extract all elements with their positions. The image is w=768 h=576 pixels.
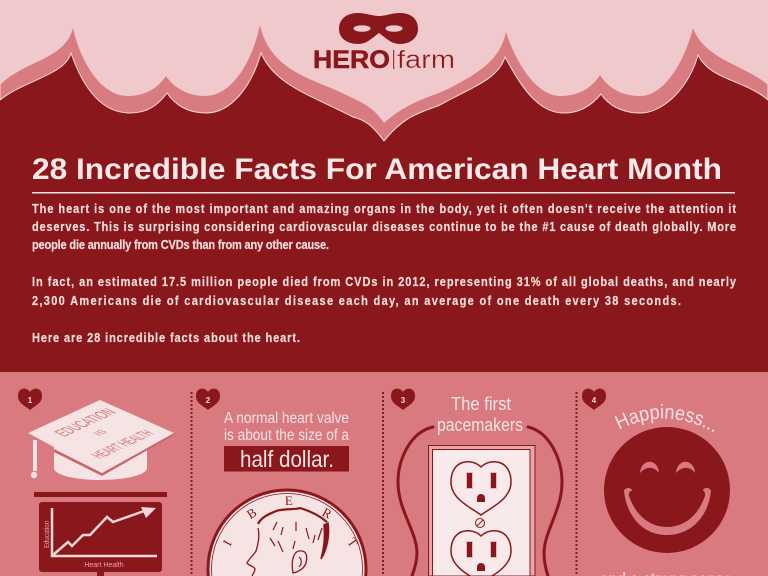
icon: mask	[339, 13, 418, 44]
panel 3: heart outlet	[428, 446, 535, 576]
coin legend: B	[244, 504, 260, 522]
coin legend: I	[219, 537, 235, 548]
heart 4: 4	[592, 396, 597, 405]
intro text: people die annually from CVDs than from any other cause.	[32, 238, 329, 252]
intro text: In fact, an estimated 17.5 million people died from CVDs in 2012, representing 31% of all global deaths, and nearly	[32, 275, 736, 289]
panel 3: pacemakers heading: pacemakers	[437, 415, 523, 435]
cap text	[50, 406, 158, 461]
panel 2: half dollar text: half dollar.	[240, 446, 334, 472]
number hearts	[18, 389, 606, 410]
heart 3	[391, 389, 415, 410]
cap text: HEART HEALTH	[87, 428, 158, 461]
heart 3: 3	[401, 396, 406, 405]
panel 2: half dollar text	[224, 410, 349, 472]
intro text	[32, 202, 736, 345]
title: 28 Incredible Facts For American Heart Month	[32, 153, 722, 186]
heart 4	[582, 389, 606, 410]
logo wordmark: HERO	[313, 46, 390, 74]
logo wordmark	[313, 46, 455, 74]
coin legend: T	[344, 535, 361, 550]
panel: facts background	[0, 372, 768, 576]
panel 3: pacemakers heading	[437, 394, 523, 435]
heart 2: 2	[206, 396, 211, 405]
panel 3: wires	[398, 427, 562, 576]
panel 2: half dollar coin	[206, 488, 368, 576]
line chart	[53, 510, 147, 555]
cap text: IS	[92, 429, 111, 437]
intro text: 2,300 Americans die of cardiovascular disease each day, an average of one death every 38 seconds.	[32, 294, 681, 308]
logo: HERO farm	[313, 13, 455, 74]
panel 3: pacemakers heading: The first	[451, 394, 511, 414]
heart 1: 1	[28, 396, 33, 405]
header: scalloped banner	[0, 0, 768, 141]
cap text: EDUCATION	[50, 406, 120, 439]
panel 1: chart board	[34, 492, 167, 576]
axis labels: Education	[44, 521, 51, 548]
intro text: Here are 28 incredible facts about the heart.	[32, 331, 300, 345]
panel 2: half dollar text: A normal heart valve	[224, 410, 349, 427]
heart 1	[18, 389, 42, 410]
upper socket	[451, 462, 511, 515]
screw	[476, 518, 484, 528]
panel 4: happiness heading: Happiness...	[614, 404, 714, 432]
panel 1: graduation cap	[28, 400, 174, 480]
panel 1: chart board: Heart Health	[84, 562, 124, 569]
lower socket	[451, 531, 511, 576]
coin legend: E	[285, 493, 293, 508]
logo wordmark: farm	[397, 46, 455, 74]
coin legend	[219, 493, 361, 550]
intro text: deserves. This is surprising considering cardiovascular diseases continue to be the #1 cause of death globally. More	[32, 220, 736, 234]
panel 4: smiley face	[604, 427, 730, 553]
panel 2: half dollar text: is about the size of a	[224, 427, 349, 444]
intro text: The heart is one of the most important and amazing organs in the body, yet it often doesn't receive the attention it	[32, 202, 736, 216]
coin legend: R	[320, 504, 335, 522]
column dividers	[192, 392, 576, 576]
coin portrait	[247, 508, 329, 576]
heart 2	[196, 389, 220, 410]
